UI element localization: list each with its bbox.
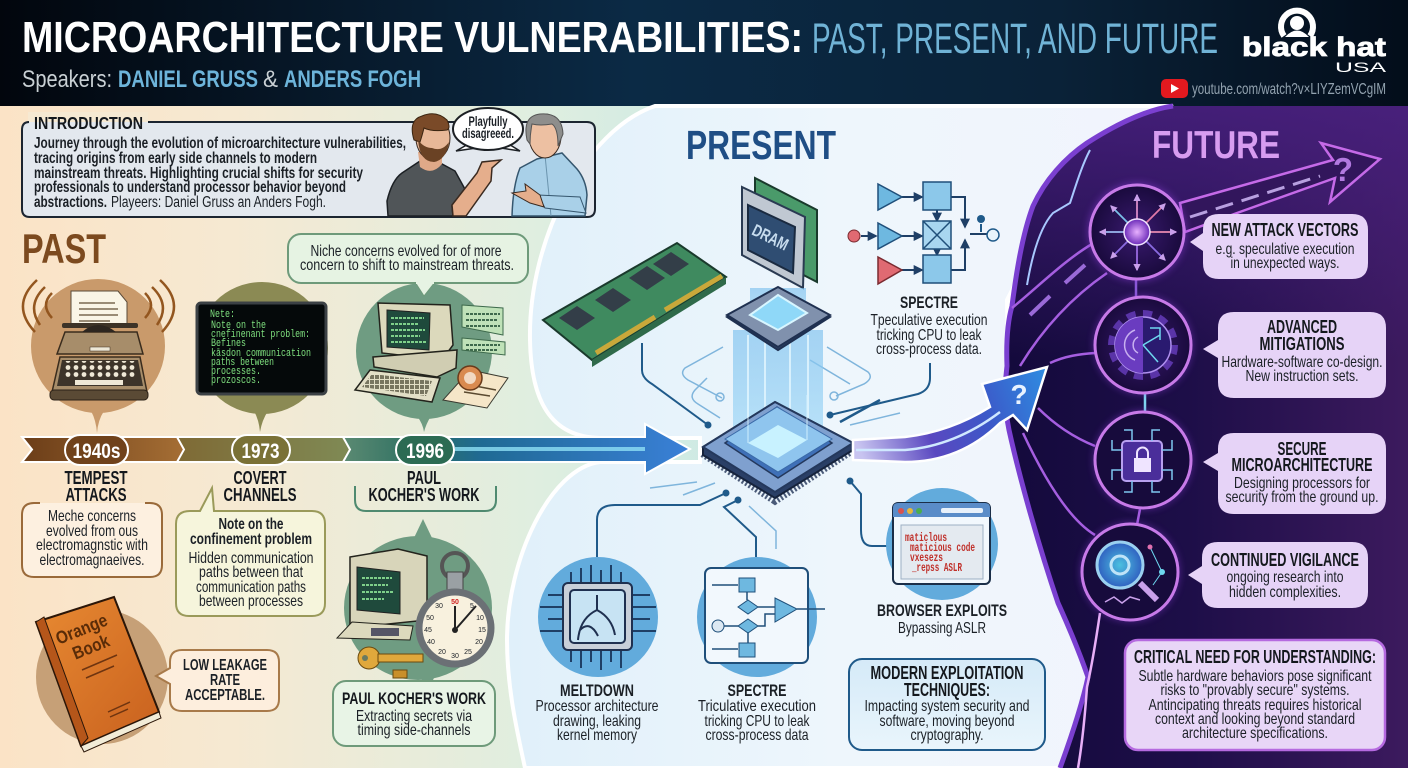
icon: terminal 1973: cnefinenant problem:	[211, 329, 310, 341]
black hat logo: black hat	[1242, 32, 1386, 62]
arrow: future direction: ?	[1333, 151, 1353, 188]
icon: terminal 1973: kāsdon communication	[211, 348, 311, 360]
covert channels box: communication paths	[196, 579, 306, 596]
panel: paul kocher's work	[333, 681, 495, 746]
spectre text bottom: SPECTRE	[728, 681, 786, 700]
icon: browser window: maticlous	[905, 532, 947, 545]
callout: advanced mitigations	[1203, 312, 1386, 398]
title: MICROARCHITECTURE VULNERABILITIES:	[22, 13, 803, 62]
stopwatch: 30	[435, 603, 443, 610]
covert channels box: between processes	[199, 593, 303, 610]
icon: computer 1996	[355, 283, 508, 432]
circuit traces	[597, 343, 930, 557]
1996 marker	[396, 435, 454, 465]
speakers line: ANDERS FOGH	[284, 66, 421, 93]
tempest attacks label: ATTACKS	[66, 484, 126, 505]
arrow: present to future	[853, 367, 1047, 462]
spectre text bottom	[698, 681, 816, 744]
1996 marker: 1996	[406, 440, 444, 463]
callout: low leakage	[156, 650, 279, 711]
panel: modern exploitation techniques: MODERN EXPLOITATION	[870, 662, 1024, 683]
spectre text top: SPECTRE	[900, 293, 958, 312]
callout: continued vigilance: ongoing research into	[1226, 569, 1344, 586]
icon: browser window: maticious code	[910, 542, 975, 555]
icon: orange book	[36, 597, 168, 752]
spectre text top: Tpeculative execution	[870, 312, 988, 329]
tempest box: electromagnstic with	[36, 537, 148, 554]
tempest attacks label	[64, 467, 128, 505]
icon: CPU	[703, 395, 853, 500]
spectre text top: tricking CPU to leak	[876, 327, 982, 344]
spectre text bottom: cross-process data	[706, 727, 809, 744]
icon: terminal 1973	[196, 282, 328, 432]
icon: terminal 1973: Befines	[211, 338, 246, 350]
present background	[507, 106, 1173, 768]
covert channels box: Hidden communication	[188, 550, 314, 567]
icon: browser window: vxesezs	[910, 552, 943, 565]
speaker illustration	[387, 108, 587, 216]
intro text: abstractions.	[34, 194, 107, 211]
timeline arrow	[22, 424, 690, 474]
panel: introduction	[22, 108, 595, 217]
meltdown text	[536, 681, 659, 744]
tempest attacks label: TEMPEST	[64, 467, 128, 488]
icon: terminal 1973: prozoscos.	[211, 375, 261, 387]
past background	[0, 106, 720, 768]
speech bubble: Playfully	[468, 114, 508, 129]
panel: paul kocher's work: PAUL KOCHER'S WORK	[342, 689, 487, 708]
callout: niche concerns	[288, 234, 528, 296]
spectre text top: cross-process data.	[876, 341, 982, 358]
speakers line: Speakers:	[22, 66, 112, 93]
callout: new attack vectors: e.g. speculative execution	[1216, 241, 1354, 258]
speakers line: DANIEL GRUSS	[118, 66, 258, 93]
covert channels box: paths between that	[199, 564, 303, 581]
tempest box: electromagnaeives.	[40, 552, 144, 569]
icon: browser window: _repss ASLR	[911, 562, 962, 575]
callout: advanced mitigations: MITIGATIONS	[1260, 333, 1344, 354]
book title	[53, 610, 118, 667]
panel: critical need for understanding: architecture specifications.	[1182, 725, 1328, 742]
callout: new attack vectors	[1190, 214, 1368, 279]
callout: secure microarchitecture: SECURE	[1278, 438, 1326, 459]
1940s marker: 1940s	[72, 440, 120, 463]
spectre text bottom: Triculative execution	[698, 698, 816, 715]
icon: terminal 1973: paths between	[211, 357, 274, 369]
browser exploits text: Bypassing ASLR	[898, 620, 986, 637]
arrow: present to future: ?	[1010, 379, 1028, 410]
stopwatch: 45	[424, 627, 432, 634]
browser exploits text	[877, 601, 1007, 637]
arrow: future direction	[1180, 143, 1380, 232]
panel: modern exploitation techniques: Impacting system security and	[864, 698, 1030, 715]
icon: DRAM chip: DRAM	[749, 221, 791, 254]
icon: spectre logic diagram	[848, 182, 999, 284]
callout: niche concerns: Niche concerns evolved for of more	[310, 243, 502, 260]
intro text: Playeers: Daniel Gruss an Anders Fogh.	[111, 194, 326, 211]
meltdown text: drawing, leaking	[553, 713, 641, 730]
callout: new attack vectors: in unexpected ways.	[1230, 255, 1340, 272]
callout: advanced mitigations: ADVANCED	[1267, 316, 1337, 337]
header band	[0, 0, 1408, 106]
stopwatch: 20	[438, 649, 446, 656]
panel: modern exploitation techniques: TECHNIQUES:	[904, 679, 990, 700]
icon: continued vigilance	[1081, 523, 1179, 621]
stopwatch: 50	[426, 615, 434, 622]
callout: low leakage: ACCEPTABLE.	[185, 687, 265, 704]
covert channels box: confinement problem	[190, 531, 312, 548]
intro text: Journey through the evolution of microarchitecture vulnerabilities,	[34, 135, 406, 152]
panel: modern exploitation techniques: software, moving beyond	[880, 713, 1014, 730]
speakers line: &	[263, 66, 278, 93]
heading: introduction: INTRODUCTION	[34, 113, 143, 133]
callout: advanced mitigations: New instruction sets.	[1246, 368, 1358, 385]
stopwatch: 40	[427, 639, 435, 646]
1973 marker: 1973	[242, 440, 280, 463]
stopwatch: 50	[451, 599, 459, 606]
icon: DRAM chip	[742, 178, 817, 288]
icon: advanced mitigations	[1094, 296, 1192, 394]
icon: middle chip	[727, 287, 830, 350]
book title: Book	[70, 630, 113, 663]
icon: terminal 1973: Nete:	[210, 309, 235, 321]
intro text: mainstream threats. Highlighting crucial shifts for security	[34, 165, 363, 182]
callout: secure microarchitecture: Designing processors for	[1234, 475, 1371, 492]
covert channels label: CHANNELS	[224, 484, 296, 505]
icon: meltdown chip	[538, 557, 658, 677]
1940s marker	[65, 435, 128, 465]
panel: modern exploitation techniques: cryptography.	[910, 727, 984, 744]
spectre text bottom: tricking CPU to leak	[704, 713, 810, 730]
icon: computer, stopwatch and key	[337, 519, 492, 690]
icon: terminal 1973: processes.	[211, 366, 261, 378]
panel: paul kocher's work: Extracting secrets via	[356, 708, 472, 725]
paul kocher label with bracket: KOCHER'S WORK	[368, 484, 480, 505]
panel: critical need for understanding	[1125, 640, 1385, 750]
icon: spectre flow diagram	[697, 557, 825, 677]
speech bubble	[453, 108, 523, 151]
panel: modern exploitation techniques	[849, 659, 1045, 750]
intro text: professionals to understand processor behavior beyond	[34, 179, 346, 196]
covert channels box: Note on the	[218, 516, 284, 533]
intro text: tracing origins from early side channels to modern	[34, 150, 317, 167]
speakers line	[22, 66, 421, 93]
future background	[1005, 106, 1408, 768]
icon: terminal 1973: Note on the	[211, 320, 266, 332]
speech bubble: disagreeed.	[462, 126, 514, 141]
callout: niche concerns: concern to shift to mainstream threats.	[300, 257, 514, 274]
icon: RAM stick	[543, 243, 726, 367]
black hat logo	[1242, 11, 1387, 75]
meltdown text: Processor architecture	[536, 698, 659, 715]
black hat logo: USA	[1335, 59, 1387, 75]
paul kocher label with bracket: PAUL	[407, 467, 441, 488]
heading: past: PAST	[22, 225, 106, 272]
callout: low leakage: RATE	[210, 672, 240, 689]
tempest box: Meche concerns	[48, 508, 136, 525]
intro text	[34, 135, 406, 211]
stopwatch	[419, 553, 491, 664]
callout: secure microarchitecture	[1203, 433, 1386, 514]
stopwatch: 10	[476, 615, 484, 622]
callout: continued vigilance	[1188, 542, 1368, 608]
heading: present: PRESENT	[686, 122, 836, 168]
panel: paul kocher's work: timing side-channels	[358, 722, 470, 739]
light beam	[733, 288, 823, 440]
covert channels label: COVERT	[234, 467, 287, 488]
paul kocher label with bracket	[355, 467, 496, 511]
covert channels label	[224, 467, 296, 505]
icon: secure microarchitecture	[1094, 411, 1192, 509]
icon: new attack vectors	[1088, 183, 1186, 281]
stopwatch: 20	[475, 639, 483, 646]
stopwatch: 30	[451, 653, 459, 660]
stopwatch: 15	[478, 627, 486, 634]
covert channels box	[176, 488, 325, 616]
callout: low leakage: LOW LEAKAGE	[183, 657, 267, 674]
heading: future: FUTURE	[1152, 124, 1280, 167]
callout: continued vigilance: hidden complexities.	[1229, 584, 1341, 601]
spectre text top	[870, 293, 988, 358]
meltdown text: kernel memory	[557, 727, 637, 744]
1973 marker	[232, 435, 290, 465]
tempest box	[22, 503, 162, 577]
browser exploits text: BROWSER EXPLOITS	[877, 601, 1007, 620]
meltdown text: MELTDOWN	[560, 681, 634, 700]
stopwatch: 25	[464, 649, 472, 656]
future roads	[1012, 244, 1145, 768]
tempest box: evolved from ous	[46, 523, 138, 540]
key	[358, 647, 423, 678]
icon: typewriter 1940s	[23, 279, 174, 433]
panel: critical need for understanding: risks to "provably secure" systems.	[1160, 682, 1350, 699]
icon: browser window	[886, 488, 998, 600]
stopwatch: 5	[470, 603, 474, 610]
book title: Orange	[53, 610, 110, 649]
